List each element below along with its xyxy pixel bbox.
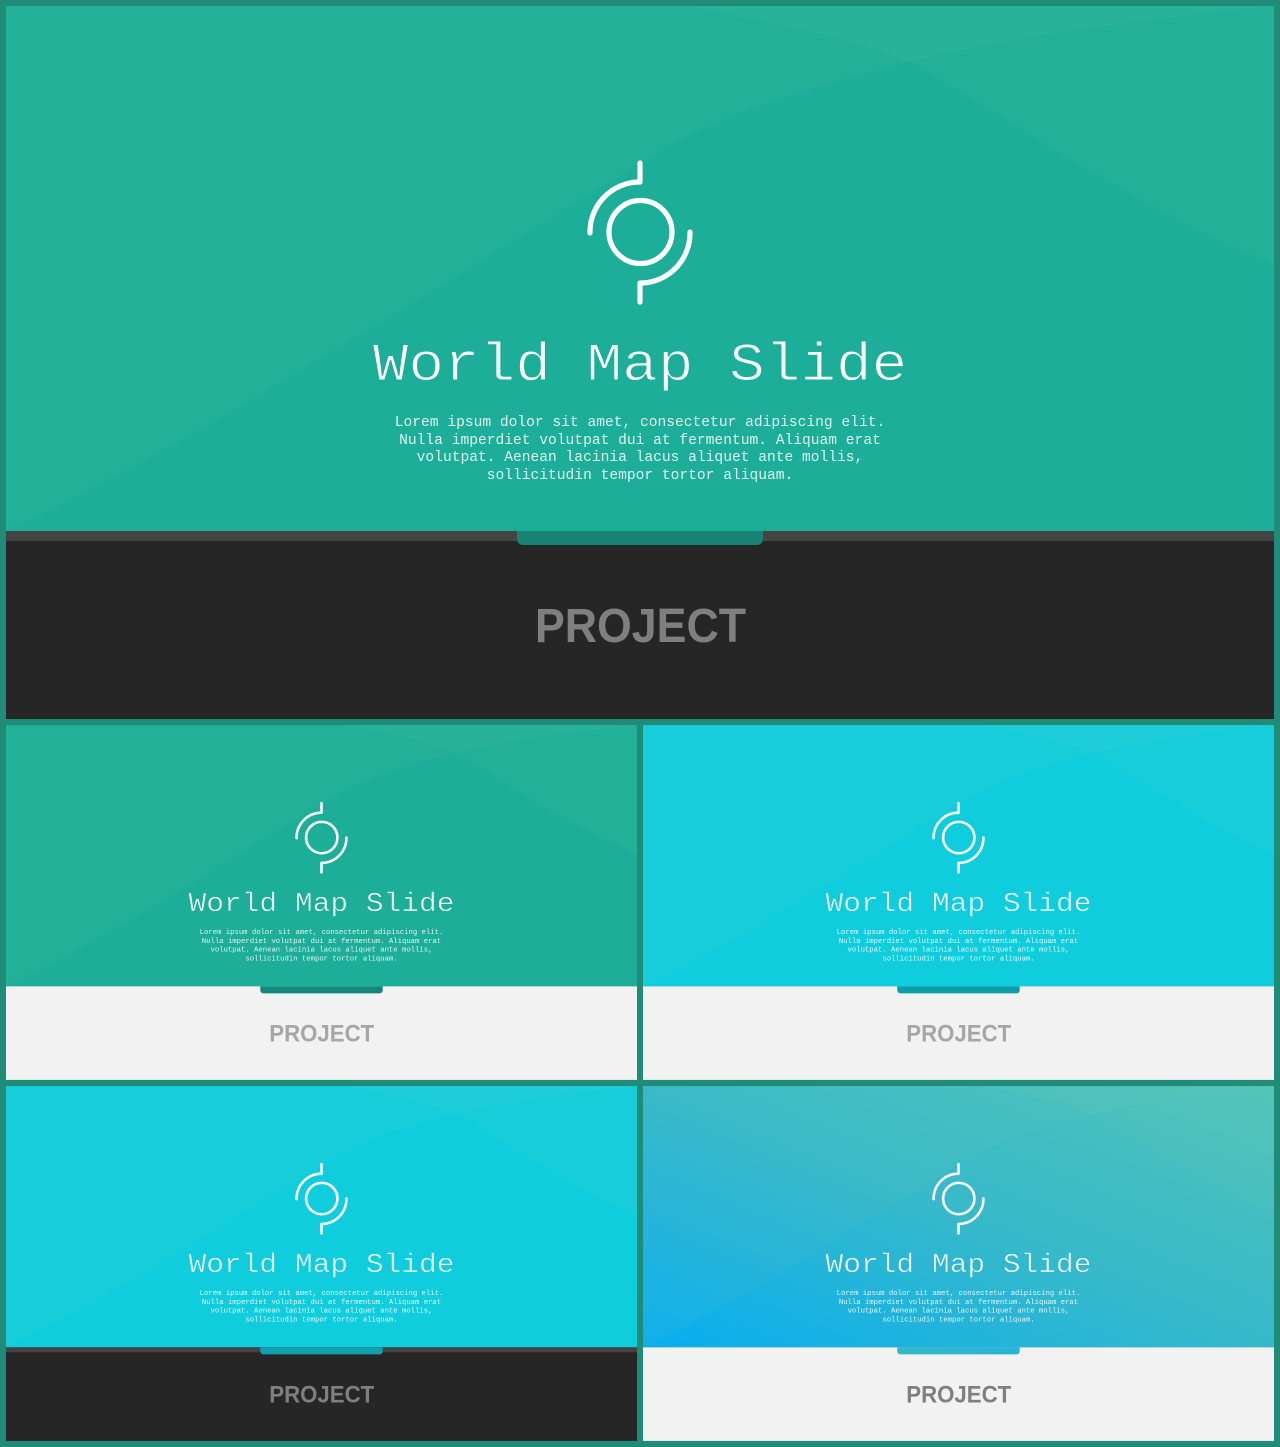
icon: ring logo: [297, 1164, 346, 1233]
panel: small gradient slide with light footer: [643, 1086, 1274, 1441]
title: World Map Slide: [189, 1251, 454, 1281]
panel: small cyan slide with dark footer: [6, 1086, 637, 1441]
title: World Map Slide: [826, 890, 1091, 920]
icon: ring logo: [590, 163, 690, 302]
footer band: [6, 986, 637, 1080]
text block: description: sollicitudin tempor tortor aliquam.: [882, 1316, 1035, 1324]
text block: description: Nulla imperdiet volutpat dui at fermentum. Aliquam erat: [839, 938, 1078, 946]
text block: description: Lorem ipsum dolor sit amet, consectetur adipiscing elit.: [837, 1290, 1080, 1298]
footer band: [6, 531, 1274, 719]
text block: description: Nulla imperdiet volutpat dui at fermentum. Aliquam erat: [202, 938, 441, 946]
title: World Map Slide: [373, 336, 907, 396]
label: project: PROJECT: [269, 1021, 375, 1048]
label: project: PROJECT: [906, 1021, 1012, 1048]
panel: large teal slide with dark footer: [6, 6, 1274, 719]
footer band: [6, 1347, 637, 1441]
icon: ring logo: [297, 803, 346, 872]
text block: description: Nulla imperdiet volutpat dui at fermentum. Aliquam erat: [202, 1299, 441, 1307]
text block: description: sollicitudin tempor tortor aliquam.: [245, 955, 398, 963]
tab: [897, 986, 1020, 993]
tab: [517, 531, 763, 545]
icon: ring logo: [934, 1164, 983, 1233]
label: project: PROJECT: [906, 1382, 1012, 1409]
title: World Map Slide: [189, 890, 454, 920]
title: World Map Slide: [826, 1251, 1091, 1281]
text block: description: sollicitudin tempor tortor aliquam.: [245, 1316, 398, 1324]
panel: small cyan slide with light footer: [643, 725, 1274, 1080]
footer band: [643, 1347, 1274, 1441]
text block: description: volutpat. Aenean lacinia lacus aliquet ante mollis,: [848, 947, 1069, 955]
text block: description: [200, 1290, 443, 1324]
panel: small teal slide with light footer: [6, 725, 637, 1080]
label: project: PROJECT: [535, 600, 746, 653]
text block: description: [395, 415, 885, 484]
text block: description: Lorem ipsum dolor sit amet, consectetur adipiscing elit.: [200, 929, 443, 937]
text block: description: volutpat. Aenean lacinia lacus aliquet ante mollis,: [848, 1308, 1069, 1316]
text block: description: volutpat. Aenean lacinia lacus aliquet ante mollis,: [417, 450, 863, 466]
footer band: [643, 986, 1274, 1080]
tab: [897, 1347, 1020, 1354]
text block: description: sollicitudin tempor tortor aliquam.: [487, 468, 793, 484]
text block: description: Nulla imperdiet volutpat dui at fermentum. Aliquam erat: [399, 433, 881, 449]
label: project: PROJECT: [269, 1382, 375, 1409]
tab: [260, 986, 383, 993]
text block: description: [837, 1290, 1080, 1324]
tab: [260, 1347, 383, 1354]
text block: description: volutpat. Aenean lacinia lacus aliquet ante mollis,: [211, 947, 432, 955]
text block: description: volutpat. Aenean lacinia lacus aliquet ante mollis,: [211, 1308, 432, 1316]
text block: description: Lorem ipsum dolor sit amet, consectetur adipiscing elit.: [200, 1290, 443, 1298]
text block: description: Nulla imperdiet volutpat dui at fermentum. Aliquam erat: [839, 1299, 1078, 1307]
text block: description: Lorem ipsum dolor sit amet, consectetur adipiscing elit.: [837, 929, 1080, 937]
icon: ring logo: [934, 803, 983, 872]
text block: description: Lorem ipsum dolor sit amet, consectetur adipiscing elit.: [395, 415, 885, 431]
text block: description: [837, 929, 1080, 963]
text block: description: sollicitudin tempor tortor aliquam.: [882, 955, 1035, 963]
text block: description: [200, 929, 443, 963]
